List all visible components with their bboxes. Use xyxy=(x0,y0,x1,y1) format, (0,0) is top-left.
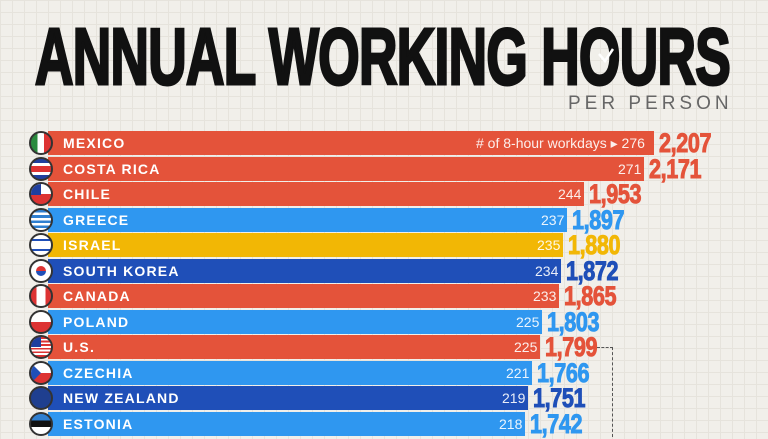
row: South Korea: SOUTH KOREA xyxy=(63,262,180,278)
row: New Zealand: NEW ZEALAND xyxy=(63,390,180,406)
row: Chile xyxy=(29,179,642,209)
row: U.S. xyxy=(29,332,598,362)
row: Poland: POLAND xyxy=(63,314,129,330)
title: ANNUAL WORKING HOURS xyxy=(35,12,730,101)
row: Greece: GREECE xyxy=(63,212,129,228)
row: Czechia: 221 xyxy=(506,364,529,380)
dashed connector from U.S. xyxy=(597,347,613,437)
row: Mexico xyxy=(29,128,711,158)
row: Czechia: CZECHIA xyxy=(63,364,134,380)
icon: clock hands in O xyxy=(598,48,614,63)
row: Chile: CHILE xyxy=(63,186,111,202)
row: Israel: ISRAEL xyxy=(63,237,122,253)
row: Mexico: MEXICO xyxy=(63,135,125,151)
row: U.S.: 1,799 xyxy=(545,332,597,362)
row: Mexico: 2,207 xyxy=(659,128,711,158)
row: U.S.: U.S. xyxy=(63,339,95,355)
subtitle: PER PERSON xyxy=(568,93,733,114)
row: New Zealand: 1,751 xyxy=(533,383,585,413)
row: Mexico: # of 8-hour workdays ▸ 276 xyxy=(476,135,645,151)
row: Costa Rica: COSTA RICA xyxy=(63,160,161,176)
row: South Korea: 1,872 xyxy=(566,256,618,286)
row: Israel: 1,880 xyxy=(568,230,620,260)
row: South Korea: 234 xyxy=(535,262,558,278)
row: Canada: CANADA xyxy=(63,288,131,304)
row: South Korea xyxy=(29,256,618,286)
row: Canada xyxy=(29,281,616,311)
row: Canada: 1,865 xyxy=(564,281,616,311)
row: Czechia: 1,766 xyxy=(537,358,589,388)
row: Poland xyxy=(29,306,600,336)
row: Estonia: 218 xyxy=(499,416,522,432)
row: New Zealand: 219 xyxy=(502,390,525,406)
row: U.S.: 225 xyxy=(514,339,537,355)
row: Poland: 1,803 xyxy=(547,306,599,336)
row: Czechia xyxy=(29,358,590,388)
row: New Zealand xyxy=(29,383,586,413)
row: Poland: 225 xyxy=(516,314,539,330)
row: Estonia: ESTONIA xyxy=(63,416,133,432)
row: Israel xyxy=(29,230,620,260)
row: Greece: 1,897 xyxy=(572,204,624,234)
row: Estonia: 1,742 xyxy=(530,408,582,438)
row: Costa Rica: 2,171 xyxy=(649,154,701,184)
row: Canada: 233 xyxy=(533,288,556,304)
row: Greece xyxy=(29,204,624,234)
row: Greece: 237 xyxy=(541,212,564,228)
row: Israel: 235 xyxy=(537,237,560,253)
row: Estonia xyxy=(29,408,582,438)
row: Costa Rica xyxy=(29,154,702,184)
row: Costa Rica: 271 xyxy=(618,160,641,176)
row: Chile: 244 xyxy=(558,186,581,202)
row: Chile: 1,953 xyxy=(589,179,641,209)
